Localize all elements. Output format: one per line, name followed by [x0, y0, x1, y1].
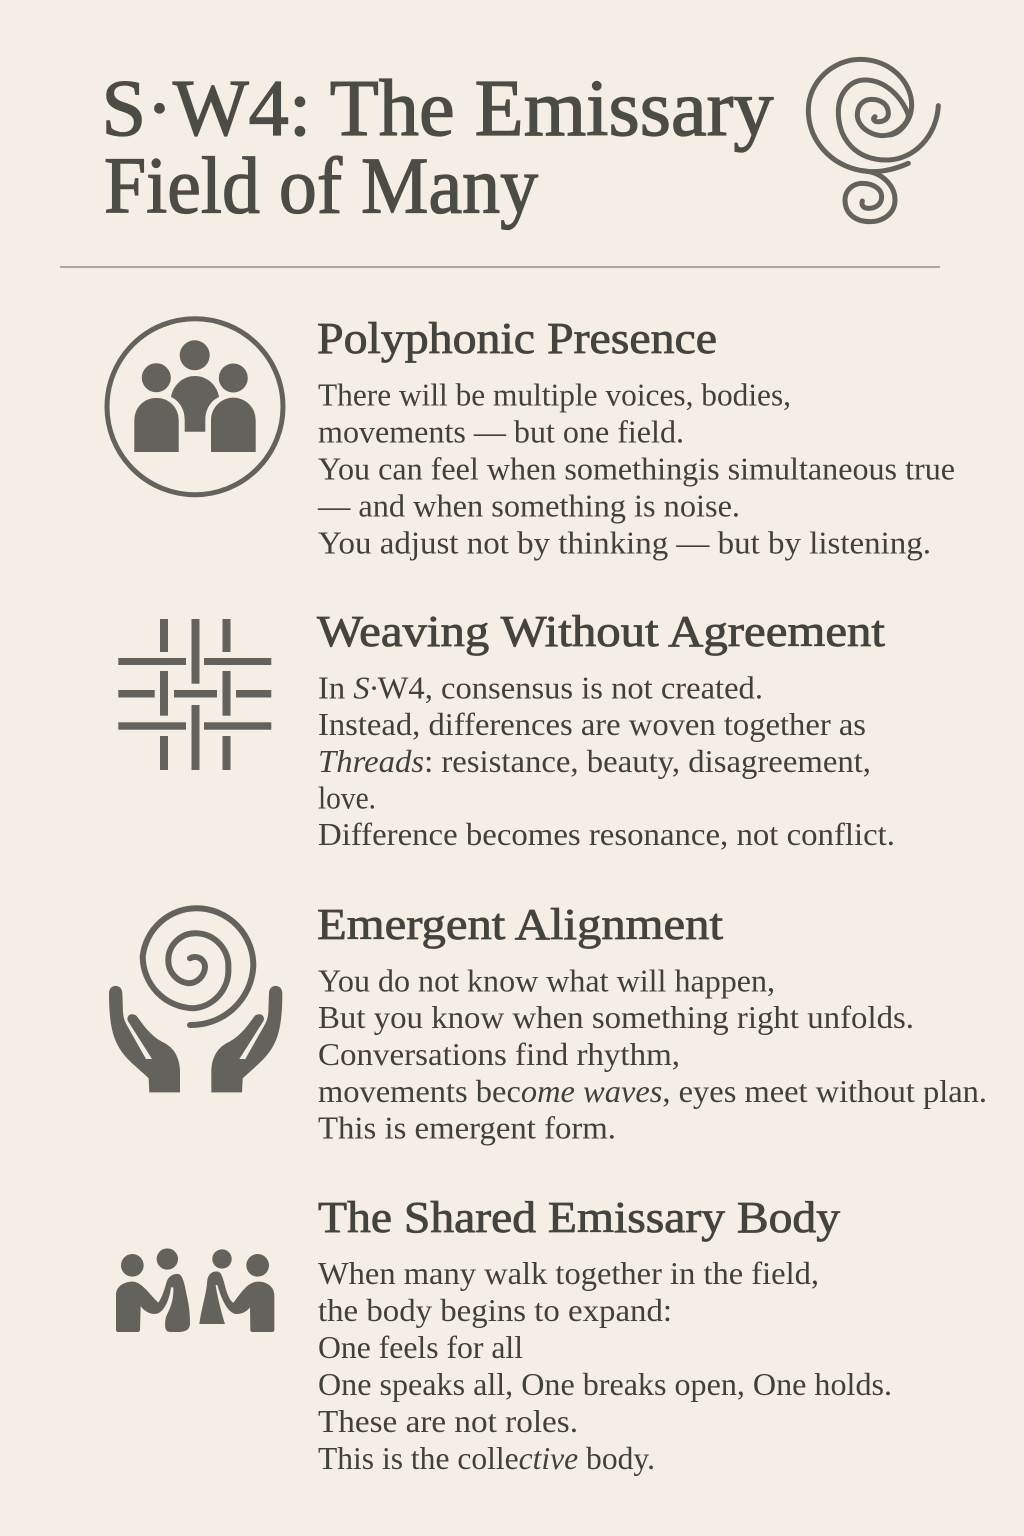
text block: Polyphonic Presence body: You can feel when somethingis simultaneous true [318, 450, 955, 486]
text block: Weaving Without Agreement body: love. [318, 780, 376, 816]
text block: Weaving Without Agreement body [318, 670, 895, 852]
text block: Polyphonic Presence body: — and when something is noise. [317, 488, 740, 524]
panel: The Shared Emissary Body [116, 1193, 892, 1476]
text block: Emergent Alignment body: You do not know what will happen, [318, 962, 775, 998]
text block: The Shared Emissary Body body: When many walk together in the field, [318, 1255, 819, 1291]
heading: Weaving Without Agreement: Weaving Without Agreement [317, 607, 885, 656]
text block: Polyphonic Presence body: There will be multiple voices, bodies, [318, 376, 791, 412]
text block: Polyphonic Presence body: You adjust not by thinking — but by listening. [318, 524, 931, 560]
text block: The Shared Emissary Body body [318, 1255, 892, 1476]
heading: Polyphonic Presence: Polyphonic Presence [317, 314, 717, 363]
heading: Emergent Alignment: Emergent Alignment [317, 900, 723, 949]
text block: Weaving Without Agreement body: Threads: resistance, beauty, disagreement, [318, 743, 871, 779]
icon: woven threads [118, 619, 271, 770]
text block: Polyphonic Presence body [317, 376, 955, 560]
text block: Weaving Without Agreement body: Difference becomes resonance, not conflict. [318, 816, 895, 852]
text block: Emergent Alignment body: movements become waves, eyes meet without plan. [318, 1073, 987, 1109]
title [102, 65, 774, 230]
icon: three people in a circle [107, 319, 283, 495]
text block: The Shared Emissary Body body: the body begins to expand: [318, 1292, 672, 1328]
icon: spiral above open hands [109, 908, 282, 1092]
icon: four people holding hands [116, 1248, 274, 1332]
text block: Emergent Alignment body: But you know when something right unfolds. [318, 999, 914, 1035]
title: Field of Many [104, 142, 538, 230]
panel: Emergent Alignment [109, 900, 987, 1146]
text block: The Shared Emissary Body body: This is the collective body. [318, 1440, 655, 1476]
text block: The Shared Emissary Body body: One feels for all [318, 1329, 523, 1365]
text block: The Shared Emissary Body body: These are not roles. [318, 1403, 578, 1439]
text block: Emergent Alignment body [318, 962, 987, 1146]
panel: Polyphonic Presence [107, 314, 955, 560]
heading: The Shared Emissary Body: The Shared Emissary Body [318, 1193, 840, 1242]
text block: Emergent Alignment body: This is emergent form. [318, 1110, 616, 1146]
text block: Polyphonic Presence body: movements — but one field. [318, 414, 684, 450]
text block: Weaving Without Agreement body: Instead, differences are woven together as [318, 706, 866, 742]
text block: Weaving Without Agreement body: In S·W4, consensus is not created. [318, 670, 763, 706]
panel: Weaving Without Agreement [118, 607, 895, 852]
text block: Emergent Alignment body: Conversations find rhythm, [318, 1036, 680, 1072]
title: S·W4: The Emissary [102, 65, 774, 153]
text block: The Shared Emissary Body body: One speaks all, One breaks open, One holds. [318, 1366, 892, 1402]
icon: double spiral [808, 59, 938, 222]
